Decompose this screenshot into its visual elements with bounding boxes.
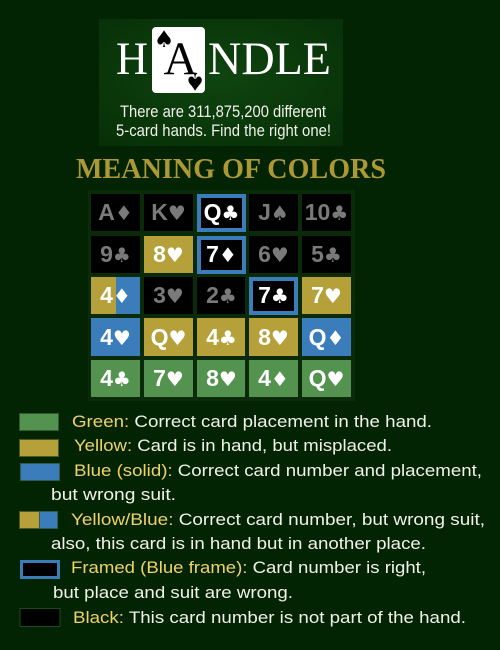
legend: framed: but place and suit are wrong. [53,583,293,602]
legend: yellow/blue: also, this card is in hand but in another place. [51,534,426,553]
row 3: 2♣ [206,282,237,308]
row 5: 8♥ [206,365,237,391]
row 1 [91,194,351,231]
row 3: 7♣ [258,282,289,308]
row 5: 4♦ [258,365,289,391]
legend: framed [22,558,426,602]
row 4: 8♥ [258,324,289,350]
row 4: 4♥ [100,324,131,350]
playing card with ace: A [164,33,198,85]
tagline: 5-card hands. Find the right one! [116,122,331,140]
row 4: 4♣ [206,324,237,350]
row 2: 7♦ [206,241,237,267]
logo wordmark remaining letters: NDLE [208,33,331,85]
card grid [88,190,355,401]
tagline: There are 311,875,200 different [120,103,326,121]
legend [20,412,485,627]
legend: yellow: Yellow: Card is in hand, but misplaced. [74,436,392,455]
legend: blue solid: Blue (solid): Correct card number and placement, [74,461,482,480]
row 3: 7♥ [311,282,342,308]
row 4: Q♦ [309,324,344,350]
row 1: J♠ [258,199,289,225]
logo wordmark left letter: H [116,33,148,85]
row 2: 8♥ [153,241,184,267]
row 2: 9♣ [100,241,131,267]
logo panel [99,19,343,146]
tagline [116,103,331,140]
legend: black: Black: This card number is not part of the hand. [73,608,466,627]
row 5 [91,360,351,397]
row 1: 10♣ [305,199,348,225]
legend: blue solid [20,461,482,504]
legend: green: Green: Correct card placement in the hand. [72,412,432,431]
row 5: 4♣ [100,365,131,391]
heading: MEANING OF COLORS [76,154,386,185]
legend: blue solid: but wrong suit. [51,485,176,504]
row 3: 3♥ [153,282,184,308]
row 5: Q♥ [309,365,344,391]
row 2 [91,236,351,273]
playing card with ace: ♠ [185,68,205,94]
row 2: 6♥ [258,241,289,267]
row 1: A♦ [98,199,133,225]
playing card with ace [152,27,205,94]
row 1: Q♣ [204,199,239,225]
legend: yellow/blue [20,510,485,553]
row 3 [91,277,351,314]
row 3: 4♦ [100,282,131,308]
legend: framed: Framed (Blue frame): Card number is right, [71,558,426,577]
row 2: 5♣ [311,241,342,267]
row 5: 7♥ [153,365,184,391]
legend: yellow/blue: Yellow/Blue: Correct card number, but wrong suit, [71,510,485,529]
row 1: K♥ [151,199,186,225]
row 4 [91,318,351,356]
playing card with ace: ♠ [154,27,174,53]
row 4: Q♥ [151,324,186,350]
